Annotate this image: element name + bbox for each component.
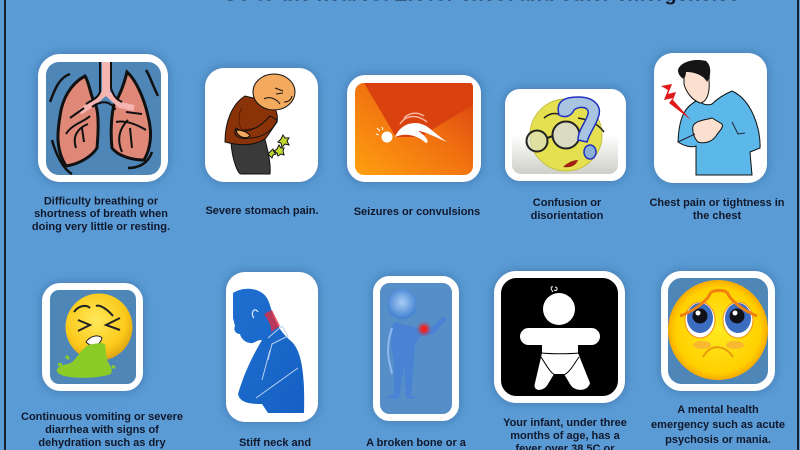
panel: stomach pain <box>205 68 319 217</box>
label: Your infant, under three <box>503 417 627 429</box>
label: Confusion or <box>533 197 602 209</box>
panel: mental health <box>651 274 785 446</box>
label <box>649 197 785 222</box>
label: dehydration such as dry <box>38 437 166 449</box>
panel: seizures <box>350 78 480 218</box>
icon: baby pictogram <box>498 274 622 400</box>
icon: vomiting face <box>46 286 140 388</box>
label: disorientation <box>531 210 604 222</box>
label: psychosis or mania. <box>665 434 771 446</box>
panel: vomiting <box>21 286 183 449</box>
label <box>531 197 604 222</box>
label: doing very little or resting. <box>32 221 170 233</box>
label <box>32 196 170 233</box>
label <box>21 411 183 449</box>
label: diarrhea with signs of <box>45 424 159 436</box>
label: Severe stomach pain. <box>205 205 319 217</box>
icon: man clutching chest <box>654 53 767 183</box>
panel: stiff neck <box>226 272 318 449</box>
label: Continuous vomiting or severe <box>21 411 183 423</box>
icon: seizure figure <box>350 78 478 178</box>
panel: difficulty breathing <box>32 58 170 233</box>
panel: chest pain <box>649 53 785 222</box>
label: A mental health <box>677 404 759 416</box>
icon: man holding neck <box>226 272 318 422</box>
label: shortness of breath when <box>34 208 168 220</box>
panel: infant fever <box>498 274 627 450</box>
label: Difficulty breathing or <box>44 196 159 208</box>
icon: lungs <box>42 58 164 178</box>
icon: figure with injured arm <box>376 280 456 418</box>
label <box>651 404 785 446</box>
label: the chest <box>693 210 741 222</box>
label: A broken bone or a <box>366 437 467 449</box>
label: Chest pain or tightness in <box>649 197 785 209</box>
panel: broken bone <box>366 280 467 449</box>
panel: confusion <box>505 89 626 222</box>
icon: sad face <box>664 274 772 388</box>
label: months of age, has a <box>510 430 621 442</box>
icon: confused face with question mark <box>505 89 626 181</box>
label: emergency such as acute <box>651 419 785 431</box>
icon: man holding stomach <box>205 68 318 182</box>
label: Stiff neck and <box>239 437 311 449</box>
label <box>503 417 627 450</box>
label: Seizures or convulsions <box>354 206 480 218</box>
